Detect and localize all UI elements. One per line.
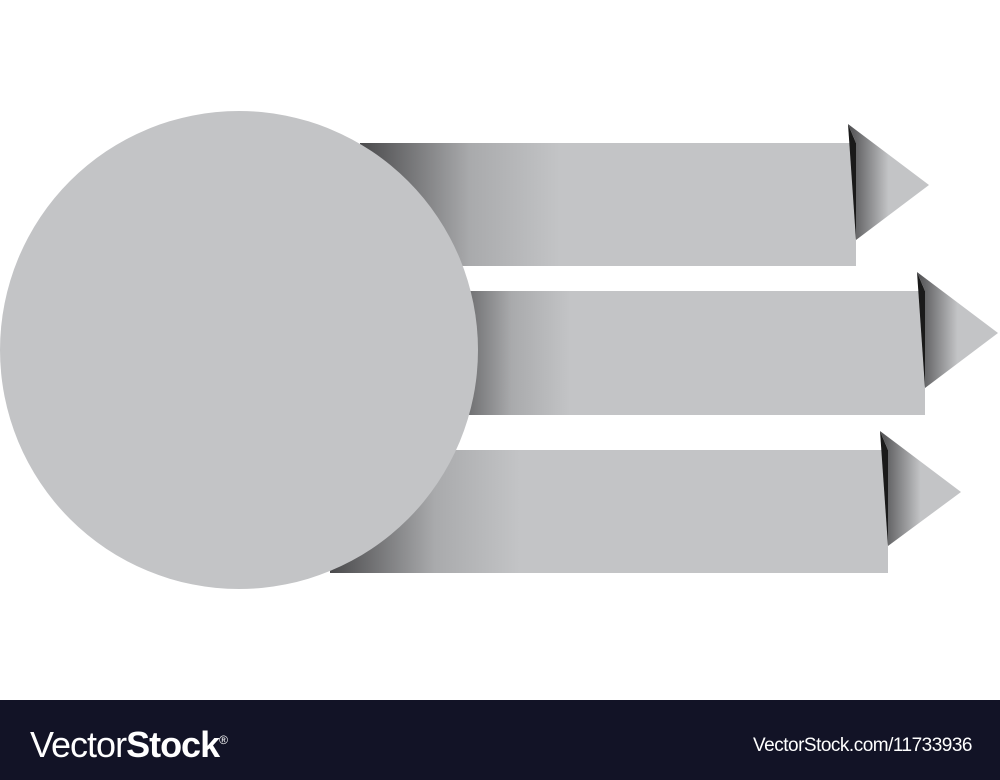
arrow 2	[440, 272, 998, 415]
circle	[0, 111, 478, 589]
arrow 3	[330, 431, 961, 573]
footer bar	[0, 700, 1000, 780]
footer url: VectorStock.com/11733936	[753, 735, 972, 756]
arrow 1	[360, 124, 929, 266]
footer logo: VectorStock®	[30, 724, 227, 765]
